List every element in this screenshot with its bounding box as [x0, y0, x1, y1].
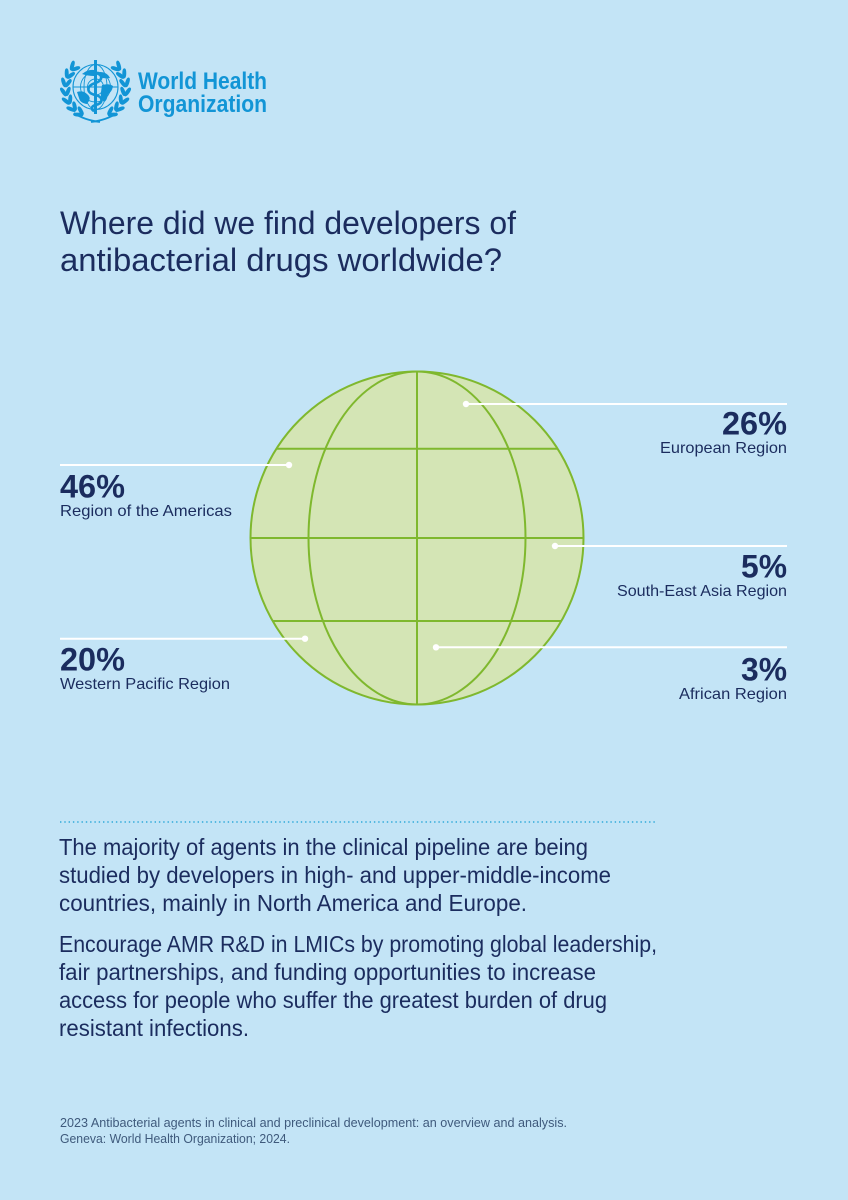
- WHO logo: [59, 60, 267, 122]
- stat: Western Pacific Region: [60, 642, 230, 693]
- stat: African Region: African Region: [679, 686, 787, 703]
- stat: South-East Asia Region: South-East Asia Region: [617, 583, 787, 600]
- icon: WHO emblem: [59, 60, 132, 122]
- leader: European Region: [463, 401, 787, 407]
- stat: South-East Asia Region: 5%: [741, 548, 787, 584]
- stat: Western Pacific Region: 20%: [60, 642, 125, 678]
- text block: recommendation: Encourage AMR R&D in LMICs by promoting global leadership,: [59, 931, 657, 957]
- globe: [250, 372, 584, 704]
- wordmark: Organization: [138, 91, 267, 118]
- stat: African Region: 3%: [741, 652, 787, 688]
- leader: African Region: [433, 644, 787, 650]
- wordmark: World Health: [138, 68, 267, 95]
- source citation: Geneva: World Health Organization; 2024.: [60, 1131, 290, 1146]
- text block: pipeline finding: studied by developers in high- and upper-middle-income: [59, 862, 611, 888]
- title: [60, 205, 516, 278]
- source citation: [60, 1115, 567, 1146]
- stat: South-East Asia Region: [617, 548, 787, 600]
- text block: recommendation: resistant infections.: [59, 1015, 249, 1041]
- stat: Region of the Americas: Region of the Americas: [60, 503, 232, 520]
- stat: European Region: [660, 406, 787, 457]
- text block: pipeline finding: [59, 834, 611, 916]
- text block: recommendation: fair partnerships, and funding opportunities to increase: [59, 959, 596, 985]
- stat: Western Pacific Region: Western Pacific Region: [60, 676, 230, 693]
- wordmark: [138, 68, 267, 118]
- source citation: 2023 Antibacterial agents in clinical and preclinical development: an overview and analysis.: [60, 1115, 567, 1130]
- leader: Western Pacific Region: [60, 636, 308, 642]
- title: antibacterial drugs worldwide?: [60, 242, 502, 278]
- text block: recommendation: access for people who suffer the greatest burden of drug: [59, 987, 607, 1013]
- stat: Region of the Americas: 46%: [60, 468, 125, 504]
- leader: Region of the Americas: [60, 462, 292, 468]
- text block: pipeline finding: countries, mainly in North America and Europe.: [59, 890, 527, 916]
- stat: African Region: [679, 652, 787, 703]
- text block: pipeline finding: The majority of agents in the clinical pipeline are being: [59, 834, 588, 860]
- title: Where did we find developers of: [60, 205, 516, 241]
- stat: European Region: 26%: [722, 406, 787, 442]
- stat: Region of the Americas: [60, 468, 232, 520]
- text block: recommendation: [59, 931, 657, 1041]
- leader: South-East Asia Region: [552, 543, 787, 549]
- stat: European Region: European Region: [660, 440, 787, 457]
